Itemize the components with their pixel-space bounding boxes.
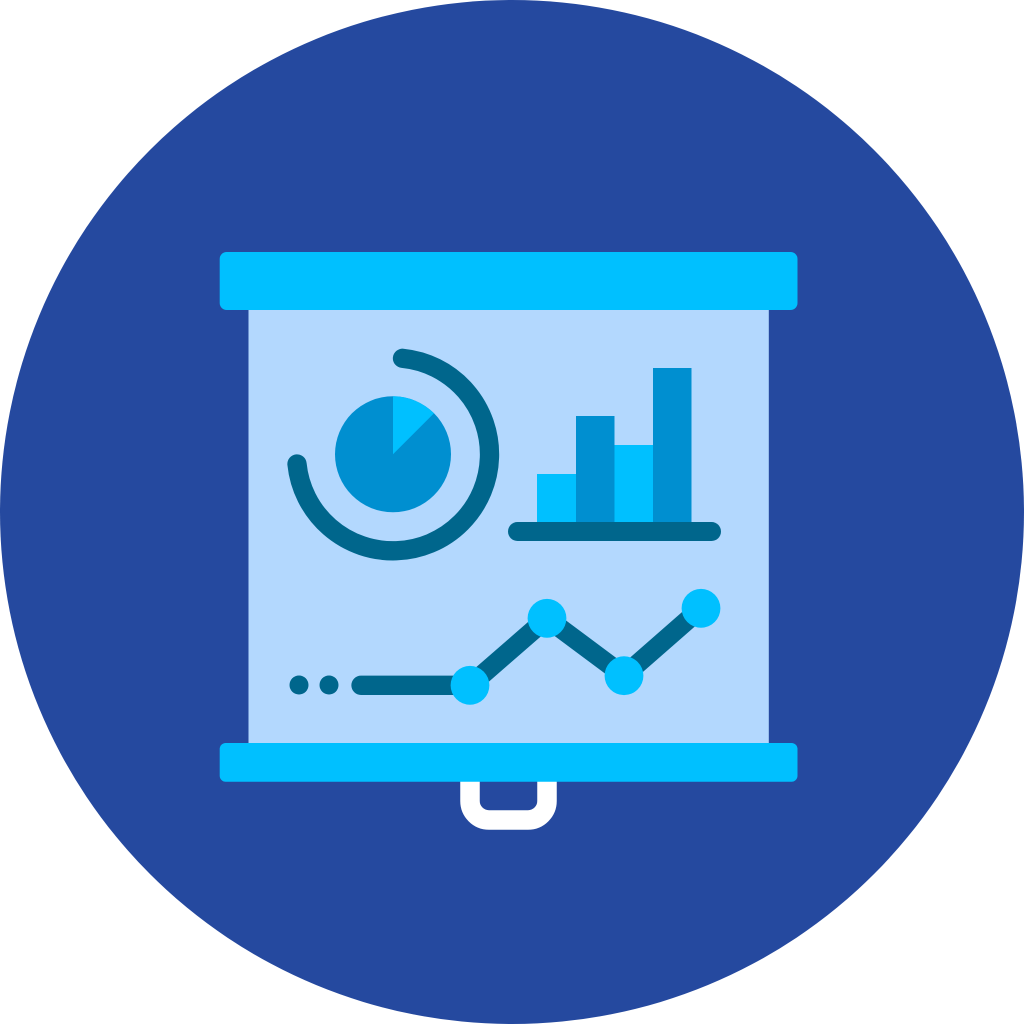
- pull handle: [470, 775, 547, 820]
- leading dots: [290, 676, 308, 694]
- bar chart: [508, 368, 721, 541]
- progress ring: [297, 358, 490, 551]
- top roller: [220, 252, 797, 310]
- bottom bar: [220, 743, 797, 782]
- baseline: [508, 522, 721, 541]
- line chart: [290, 589, 720, 705]
- donut and pie chart: [297, 358, 490, 551]
- projection screen: [248, 300, 769, 750]
- pie highlighted slice: [393, 396, 434, 454]
- bars: [537, 474, 576, 524]
- pie base: [335, 396, 451, 512]
- trend line: [361, 608, 701, 685]
- data points: [451, 666, 489, 705]
